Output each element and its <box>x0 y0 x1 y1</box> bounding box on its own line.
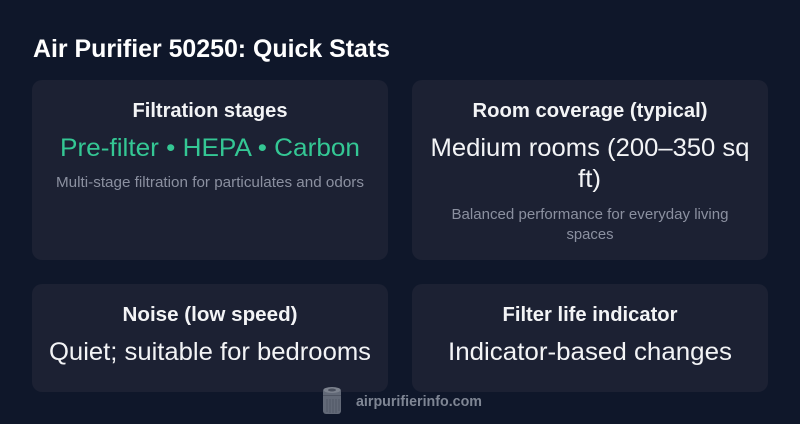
icon: air purifier <box>323 387 341 414</box>
description: room coverage <box>452 207 728 243</box>
description: filtration: Multi-stage filtration for particulates and odors <box>56 175 364 191</box>
value: filter stages: Pre-filter • HEPA • Carbon <box>60 134 360 162</box>
value: room size <box>430 134 750 193</box>
description: room coverage: spaces <box>566 227 614 243</box>
value: noise: Quiet; suitable for bedrooms <box>49 338 371 366</box>
panel: noise <box>32 284 388 392</box>
title: Air Purifier 50250: Quick Stats <box>33 35 390 63</box>
footer text: airpurifierinfo.com <box>356 394 482 410</box>
heading: filtration stages: Filtration stages <box>132 100 288 122</box>
panel: filter life <box>412 284 768 392</box>
value: filter life: Indicator-based changes <box>448 338 732 366</box>
description: room coverage: Balanced performance for everyday living <box>452 207 728 223</box>
heading: room coverage: Room coverage (typical) <box>472 100 708 122</box>
panel: filtration stages <box>32 80 388 260</box>
value: room size: ft) <box>578 165 601 193</box>
footer branding <box>323 387 482 414</box>
value: room size: Medium rooms (200–350 sq <box>430 134 750 162</box>
heading: noise: Noise (low speed) <box>122 304 298 326</box>
heading: filter life: Filter life indicator <box>502 304 678 326</box>
panel: room coverage <box>412 80 768 260</box>
